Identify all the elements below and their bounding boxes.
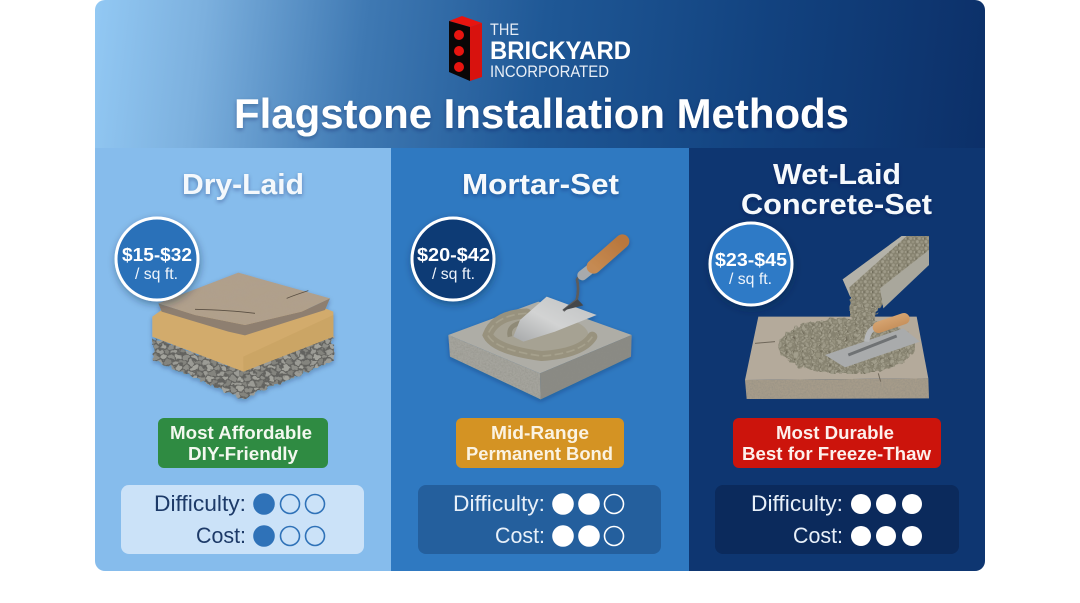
ratings: difficulty and cost	[418, 485, 661, 554]
illustration: trowel on mortar and concrete block	[448, 241, 632, 399]
ratings: difficulty and cost: Cost:	[793, 523, 843, 548]
badge: Most Affordable DIY-Friendly	[158, 418, 328, 468]
heading: Wet-Laid Concrete-Set: Wet-Laid	[773, 159, 901, 191]
price badge: $15-$32: $15-$32	[122, 244, 192, 265]
price badge: $23-$45	[710, 223, 792, 305]
badge: Mid-Range Permanent Bond	[456, 418, 624, 468]
column background: Mortar-Set	[391, 148, 689, 571]
price badge: $20-$42: $20-$42	[417, 244, 490, 265]
badge: Most Durable Best for Freeze-Thaw: Best for Freeze-Thaw	[742, 444, 932, 464]
ratings: difficulty and cost: Difficulty:	[751, 491, 843, 516]
price badge: $23-$45: / sq ft.	[729, 271, 772, 288]
column background: Wet-Laid Concrete-Set	[689, 148, 985, 571]
price badge: $15-$32: / sq ft.	[135, 266, 178, 283]
ratings: difficulty and cost	[715, 485, 959, 554]
icon: brick	[449, 16, 482, 81]
illustration: flagstone on sand and gravel	[152, 273, 334, 399]
price badge: $20-$42: / sq ft.	[432, 266, 475, 283]
infographic card	[95, 0, 985, 571]
ratings: difficulty and cost: Difficulty:	[453, 491, 545, 516]
illustration: concrete poured on flagstone	[745, 236, 929, 399]
badge: Most Durable Best for Freeze-Thaw: Most Durable	[776, 423, 894, 443]
price badge: $20-$42	[412, 218, 494, 300]
ratings: difficulty and cost: Difficulty:	[154, 491, 246, 516]
logo wordmark: BRICKYARD	[490, 37, 631, 65]
panel: Dry-Laid	[116, 169, 364, 554]
badge: Most Durable Best for Freeze-Thaw	[733, 418, 941, 468]
ratings: difficulty and cost: Cost:	[196, 523, 246, 548]
logo wordmark: INCORPORATED	[490, 63, 609, 81]
logo: The Brickyard Incorporated	[449, 16, 631, 81]
header band	[95, 0, 985, 150]
heading: Dry-Laid: Dry-Laid	[182, 169, 304, 201]
badge: Most Affordable DIY-Friendly: Most Affordable	[170, 423, 312, 443]
title: Flagstone Installation Methods	[234, 90, 849, 137]
panel: Wet-Laid Concrete-Set	[710, 159, 959, 554]
ratings: difficulty and cost: Cost:	[495, 523, 545, 548]
heading: Wet-Laid Concrete-Set: Concrete-Set	[741, 189, 932, 221]
price badge: $23-$45: $23-$45	[715, 249, 787, 270]
heading: Mortar-Set: Mortar-Set	[462, 169, 619, 201]
logo wordmark: THE	[490, 21, 519, 39]
price badge: $15-$32	[116, 218, 198, 300]
badge: Mid-Range Permanent Bond: Mid-Range	[491, 423, 589, 443]
panel: Mortar-Set	[412, 169, 661, 554]
badge: Most Affordable DIY-Friendly: DIY-Friendly	[188, 444, 298, 464]
ratings: difficulty and cost	[121, 485, 364, 554]
logo wordmark	[490, 21, 631, 81]
column background: Dry-Laid	[95, 148, 391, 571]
badge: Mid-Range Permanent Bond: Permanent Bond	[466, 444, 613, 464]
heading: Wet-Laid Concrete-Set	[741, 159, 932, 221]
